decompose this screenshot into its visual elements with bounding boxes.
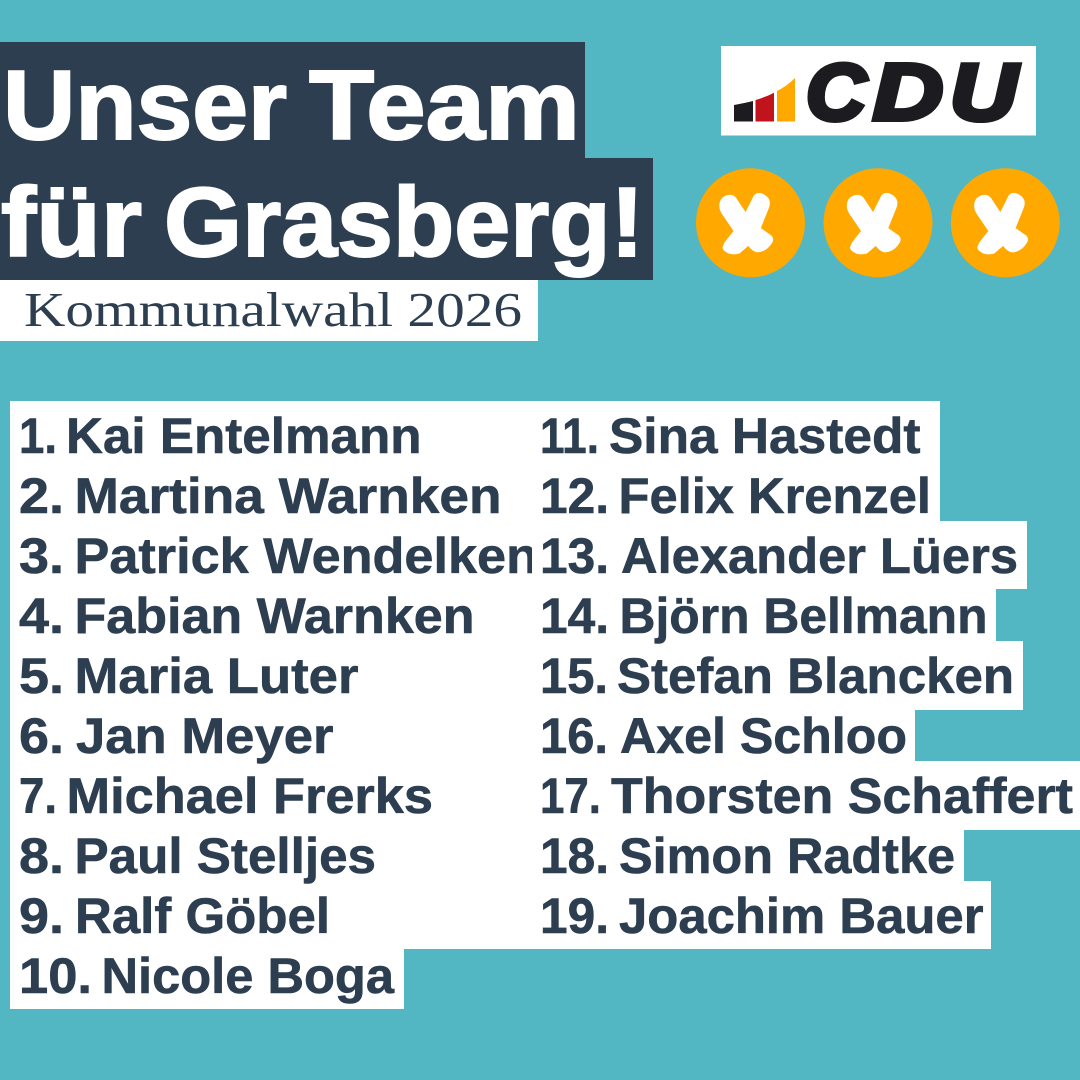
panel: candidates 11 to 19: 12.: [540, 468, 609, 524]
subtitle: Kommunalwahl 2026: [24, 282, 522, 337]
title: Unser: [3, 50, 287, 160]
panel: candidates 1 to 10: Michael Frerks: [66, 768, 433, 824]
panel: candidates 11 to 19: Stefan Blancken: [617, 648, 1014, 704]
panel: candidates 1 to 10: 10.: [19, 948, 92, 1004]
panel: candidates 1 to 10: 7.: [19, 768, 57, 824]
panel: candidates 1 to 10: Kai Entelmann: [66, 408, 422, 464]
icon: vote cross 3: [951, 168, 1060, 277]
panel: candidates 11 to 19: 19.: [540, 888, 609, 944]
panel: candidates 1 to 10: 5.: [19, 648, 64, 704]
title: [0, 42, 653, 280]
logo: CDU: U: [950, 48, 1020, 136]
panel: candidates 1 to 10: 4.: [19, 588, 64, 644]
panel: candidates 1 to 10: Ralf Göbel: [75, 888, 330, 944]
panel: candidates 1 to 10: 1.: [19, 408, 57, 464]
panel: candidates 1 to 10: Martina Warnken: [74, 468, 502, 524]
panel: candidates 1 to 10: Nicole Boga: [102, 948, 395, 1004]
panel: candidates 1 to 10: 8.: [19, 828, 64, 884]
panel: candidates 11 to 19: Joachim Bauer: [619, 888, 984, 944]
panel: candidates 11 to 19: Sina Hastedt: [609, 408, 921, 464]
panel: candidates 11 to 19: 14.: [540, 588, 609, 644]
logo: CDU: D: [873, 48, 943, 136]
panel: candidates 1 to 10: Fabian Warnken: [74, 588, 474, 644]
panel: candidates 1 to 10: 9.: [19, 888, 64, 944]
panel: candidates 11 to 19: 18.: [540, 828, 609, 884]
panel: candidates 11 to 19: 15.: [540, 648, 608, 704]
title: Grasberg!: [164, 167, 644, 277]
panel: candidates 11 to 19: 17.: [540, 768, 601, 824]
panel: candidates 11 to 19: [532, 401, 1080, 949]
panel: candidates 11 to 19: Simon Radtke: [619, 828, 955, 884]
panel: candidates 11 to 19: Thorsten Schaffert: [611, 768, 1073, 824]
panel: candidates 1 to 10: Maria Luter: [74, 648, 358, 704]
logo: CDU: [721, 46, 1036, 136]
icon: vote cross 2: [824, 168, 932, 277]
logo: CDU: C: [806, 48, 867, 136]
panel: candidates 11 to 19: Alexander Lüers: [621, 528, 1018, 584]
panel: candidates 11 to 19: Felix Krenzel: [618, 468, 931, 524]
panel: candidates 1 to 10: 3.: [19, 528, 64, 584]
panel: candidates 1 to 10: [10, 401, 540, 1009]
panel: candidates 11 to 19: Axel Schloo: [620, 708, 907, 764]
panel: candidates 11 to 19: Björn Bellmann: [620, 588, 988, 644]
panel: candidates 1 to 10: Paul Stelljes: [74, 828, 376, 884]
panel: candidates 1 to 10: Patrick Wendelken: [74, 528, 538, 584]
title: Team: [309, 50, 580, 160]
panel: candidates 1 to 10: Jan Meyer: [76, 708, 334, 764]
panel: candidates 11 to 19: 16.: [540, 708, 608, 764]
panel: candidates 11 to 19: 11.: [540, 408, 599, 464]
title: für: [1, 167, 142, 277]
panel: candidates 1 to 10: 6.: [19, 708, 64, 764]
panel: candidates 1 to 10: 2.: [19, 468, 64, 524]
panel: candidates 11 to 19: 13.: [540, 528, 609, 584]
icon: vote cross 1: [696, 168, 805, 277]
